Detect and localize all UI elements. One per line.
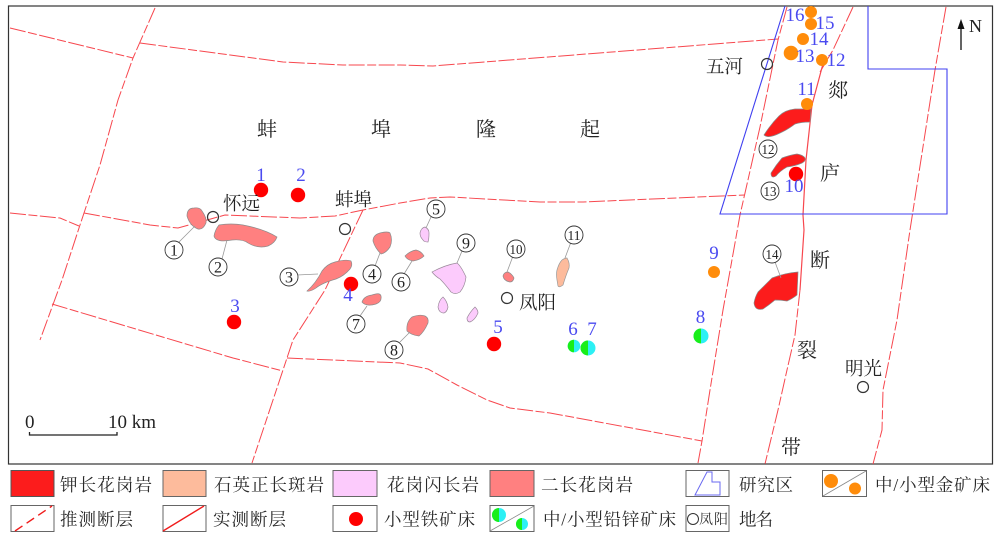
north arrow: N	[969, 16, 982, 36]
Tan-Lu fault belt label: 带	[781, 436, 801, 459]
Bengbu uplift label: 隆	[476, 118, 496, 141]
legend: inferred fault	[11, 506, 134, 532]
label 13	[761, 182, 779, 200]
deposit numbers: 12	[826, 50, 846, 71]
label 12: 12	[762, 143, 774, 158]
legend: quartz porphyry: 石英正长斑岩	[214, 475, 324, 495]
deposit numbers: 14	[810, 29, 829, 50]
place names: 蚌埠	[335, 190, 372, 211]
K-feldspar granite bodies	[754, 109, 811, 309]
label 8	[385, 341, 403, 360]
inferred faults	[10, 7, 946, 464]
deposit numbers: 9	[709, 243, 719, 264]
deposit numbers: 11	[797, 79, 816, 100]
place names: 怀远	[223, 194, 260, 215]
legend: inferred fault: 推测断层	[60, 510, 134, 530]
label 11: 11	[568, 229, 580, 244]
legend: granodiorite: 花岗闪长岩	[387, 475, 479, 495]
deposit numbers: 10	[784, 176, 804, 197]
deposit numbers: 13	[796, 46, 814, 67]
Bengbu uplift label: 埠	[371, 118, 391, 141]
legend: quartz porphyry	[163, 470, 324, 496]
Bengbu uplift label: 蚌	[257, 118, 277, 141]
legend: measured fault: 实测断层	[213, 510, 286, 530]
north arrow	[958, 16, 982, 50]
label 5	[427, 200, 445, 218]
legend: monzogranite	[490, 470, 633, 496]
quartz porphyry body	[556, 258, 569, 287]
legend: small iron deposit: 小型铁矿床	[384, 510, 475, 530]
label 8: 8	[390, 342, 398, 360]
deposit numbers: 7	[587, 319, 597, 340]
measured fault	[800, 60, 824, 290]
label 2: 2	[214, 260, 222, 276]
label 13: 13	[764, 185, 776, 200]
place names: 凤阳	[519, 293, 556, 314]
label 11	[565, 226, 583, 244]
place names	[223, 57, 882, 380]
study area boundary	[720, 6, 947, 214]
label 9	[457, 234, 475, 252]
Tan-Lu fault belt label: 裂	[797, 339, 817, 362]
Tan-Lu fault belt label: 郯	[828, 79, 848, 102]
legend: small iron deposit	[333, 506, 475, 532]
deposit numbers: 5	[493, 317, 503, 338]
label 7	[347, 315, 365, 334]
label 14	[763, 245, 781, 263]
granite bodies	[187, 109, 811, 336]
lead-zinc deposits	[568, 328, 708, 356]
deposit numbers: 2	[296, 165, 306, 186]
scale bar: 0	[25, 412, 34, 433]
deposit numbers: 15	[816, 13, 834, 34]
deposit numbers	[230, 5, 846, 340]
label 4	[363, 265, 381, 284]
label 7: 7	[352, 316, 360, 334]
label 6	[392, 273, 410, 292]
legend: gold deposits: 中/小型金矿床	[875, 475, 990, 495]
iron deposits	[227, 167, 803, 351]
deposit numbers: 6	[568, 319, 578, 340]
Tan-Lu fault belt label: 庐	[820, 162, 840, 185]
label 2	[209, 258, 227, 276]
granodiorite bodies	[420, 227, 478, 322]
legend: study area	[686, 470, 793, 496]
label 10: 10	[510, 243, 522, 258]
gold deposits	[708, 6, 828, 278]
scale bar	[25, 412, 156, 435]
Bengbu uplift label: 起	[580, 118, 600, 141]
legend: K-feldspar granite	[11, 470, 152, 496]
legend: measured fault	[163, 506, 286, 532]
monzogranite bodies	[187, 208, 514, 336]
label 4: 4	[368, 266, 376, 284]
legend: K-feldspar granite: 钾长花岗岩	[60, 475, 152, 495]
label 1	[165, 241, 183, 260]
label 10	[507, 240, 525, 258]
legend: lead-zinc deposits	[490, 506, 676, 532]
label 3	[280, 268, 298, 286]
legend: lead-zinc deposits: 中/小型铅锌矿床	[543, 510, 676, 530]
numbered intrusion labels	[165, 140, 781, 360]
Tan-Lu fault belt label	[781, 79, 848, 459]
legend: place name	[686, 506, 773, 532]
label 6: 6	[397, 274, 405, 292]
deposit numbers: 3	[230, 296, 240, 317]
deposit numbers: 16	[786, 5, 804, 26]
scale bar: 10 km	[108, 412, 156, 433]
label 5: 5	[432, 202, 440, 218]
Tan-Lu fault belt label: 断	[810, 249, 830, 272]
place names: 五河	[706, 57, 743, 78]
leader lines	[178, 217, 781, 342]
legend: gold deposits	[822, 470, 990, 496]
legend: study area: 研究区	[739, 475, 793, 495]
legend: monzogranite: 二长花岗岩	[541, 475, 633, 495]
label 1: 1	[170, 242, 178, 260]
legend: place name: 地名	[739, 510, 773, 530]
deposit numbers: 8	[696, 307, 705, 328]
deposit numbers: 1	[256, 165, 266, 186]
place names: 明光	[845, 359, 882, 380]
label 3: 3	[285, 270, 293, 286]
place markers	[208, 58, 868, 392]
legend: granodiorite	[333, 470, 479, 496]
label 9: 9	[462, 236, 470, 252]
legend	[11, 470, 990, 532]
legend: place name: 凤阳	[699, 512, 728, 528]
label 12	[759, 140, 777, 158]
deposit numbers: 4	[343, 285, 353, 306]
label 14: 14	[766, 248, 778, 263]
Bengbu uplift label	[257, 118, 600, 141]
